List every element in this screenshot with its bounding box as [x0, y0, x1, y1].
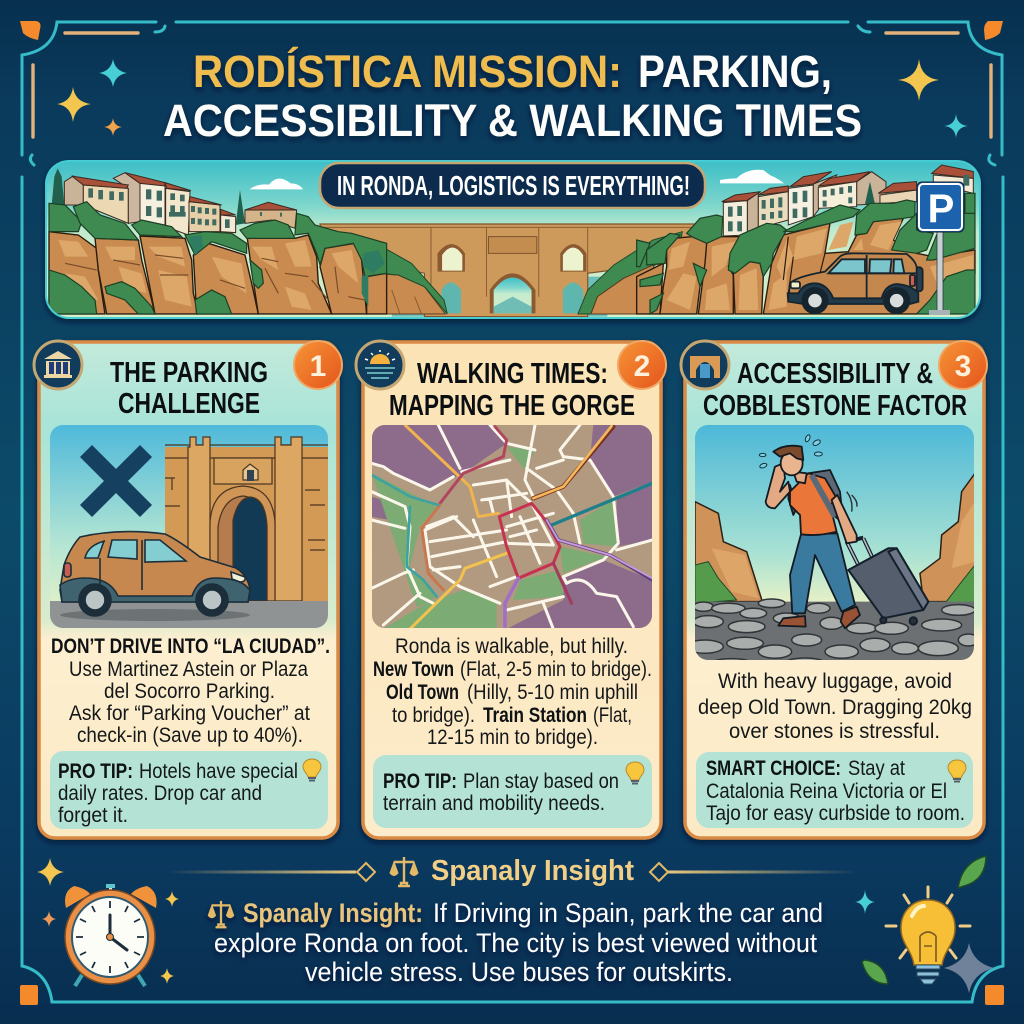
car in banner	[788, 253, 923, 313]
card 3 smart choice	[696, 752, 973, 828]
footer insight text: Spanaly Insight:	[243, 898, 423, 928]
card 3 smart choice: Tajo for easy curbside to room.	[706, 802, 965, 825]
title	[163, 46, 862, 146]
number badge 3: 3	[955, 350, 971, 383]
card 3 body text: deep Old Town. Dragging 20kg	[698, 696, 972, 719]
illustration: car blocked at city gate	[50, 425, 328, 628]
icon: monument badge	[34, 341, 82, 389]
card 2 body text	[373, 635, 652, 749]
card 1 pro tip: Hotels have special	[139, 760, 298, 783]
map regions	[372, 425, 652, 629]
illustration: traveller dragging suitcase on cobblestones	[687, 425, 978, 669]
card 1 body text	[51, 635, 330, 747]
middle: bridge and distance	[249, 179, 695, 317]
panel: the parking challenge	[34, 341, 342, 838]
card 1 heading: THE PARKING	[110, 357, 268, 389]
right town and cliffs	[637, 165, 975, 314]
left town and cliffs	[49, 168, 387, 314]
card 2 body text: New Town	[373, 658, 454, 681]
gate wall	[165, 437, 328, 601]
card 2 heading: WALKING TIMES:	[417, 358, 608, 390]
leaves and grey sparkle	[862, 856, 994, 993]
card 1 body text: del Socorro Parking.	[104, 680, 275, 703]
footer insight text: vehicle stress. Use buses for outskirts.	[305, 957, 733, 987]
banner message pill	[320, 163, 705, 208]
card 2 body text: (Hilly, 5-10 min uphill	[467, 681, 638, 704]
card 2 body text: (Flat,	[593, 704, 632, 727]
card 1 heading: CHALLENGE	[118, 388, 260, 420]
card 1 body text: DON’T DRIVE INTO “LA CIUDAD”.	[51, 635, 330, 658]
icon: sunrise badge	[356, 341, 404, 389]
card 3 smart choice: SMART CHOICE:	[706, 757, 841, 780]
banner message pill: IN RONDA, LOGISTICS IS EVERYTHING!	[337, 170, 690, 201]
ground	[50, 601, 328, 628]
card 2 body text: Ronda is walkable, but hilly.	[395, 635, 628, 658]
traveller	[766, 446, 860, 628]
walking routes	[372, 425, 652, 629]
rocks	[695, 473, 975, 602]
suitcase	[847, 538, 928, 625]
card 2 body text: Old Town	[386, 681, 459, 704]
card 1 pro tip: forget it.	[58, 804, 128, 827]
card 3 smart choice: Catalonia Reina Victoria or El	[706, 780, 947, 803]
footer insight text: explore Ronda on foot. The city is best viewed without	[214, 928, 817, 958]
card 3 body text: With heavy luggage, avoid	[718, 670, 952, 693]
card 2 heading: MAPPING THE GORGE	[389, 390, 635, 422]
icon: alarm clock	[65, 884, 157, 986]
card 2 pro tip	[373, 755, 652, 828]
streets	[372, 425, 652, 629]
sweat drops	[759, 434, 822, 469]
footer insight text: If Driving in Spain, park the car and	[433, 898, 823, 928]
title: PARKING,	[638, 46, 832, 97]
card 1 body text: Ask for “Parking Voucher” at	[69, 702, 310, 725]
card 2 body text: 12-15 min to bridge).	[427, 726, 598, 749]
card 1 pro tip: PRO TIP:	[58, 760, 133, 783]
number badge 2	[618, 341, 666, 389]
panel: walking times	[356, 341, 666, 838]
icon: light bulb	[886, 887, 970, 984]
card 3 heading	[703, 358, 967, 422]
cobblestones	[695, 602, 975, 662]
card 3 body text: over stones is stressful.	[729, 720, 940, 743]
card 2 pro tip: Plan stay based on	[463, 770, 619, 793]
number badge 2: 2	[634, 350, 650, 383]
map of Ronda	[372, 425, 652, 629]
footer insight text	[208, 898, 823, 987]
card 3 heading: ACCESSIBILITY &	[737, 358, 933, 390]
title: RODÍSTICA MISSION:	[193, 46, 622, 97]
card 1 body text: check-in (Save up to 40%).	[77, 724, 303, 747]
number badge 1: 1	[310, 350, 326, 383]
card 3 smart choice: Stay at	[848, 757, 905, 780]
panel: accessibility	[681, 341, 987, 838]
card 2 pro tip: PRO TIP:	[383, 770, 457, 793]
card 2 body text: Train Station	[483, 704, 587, 727]
card 2 heading	[389, 358, 635, 422]
card 1 pro tip: daily rates. Drop car and	[58, 782, 262, 805]
number badge 3	[939, 341, 987, 389]
card 1 body text: Use Martinez Astein or Plaza	[69, 658, 308, 681]
card 1 pro tip	[50, 751, 328, 829]
card 3 body text	[698, 670, 972, 743]
number badge 1	[294, 341, 342, 389]
footer heading: Spanaly Insight	[431, 855, 634, 887]
card 2 pro tip: terrain and mobility needs.	[383, 792, 605, 815]
car	[60, 532, 250, 616]
icon: bridge badge	[681, 341, 729, 389]
title: ACCESSIBILITY & WALKING TIMES	[163, 95, 862, 146]
card 2 body text: to bridge).	[392, 704, 475, 727]
parking sign	[917, 182, 964, 315]
no-entry X	[86, 451, 146, 511]
card 1 heading	[110, 357, 268, 420]
parking sign: P	[928, 187, 954, 231]
card 2 body text: (Flat, 2-5 min to bridge).	[460, 658, 652, 681]
footer heading	[167, 855, 857, 887]
banner: Ronda gorge and bridge	[45, 160, 981, 319]
